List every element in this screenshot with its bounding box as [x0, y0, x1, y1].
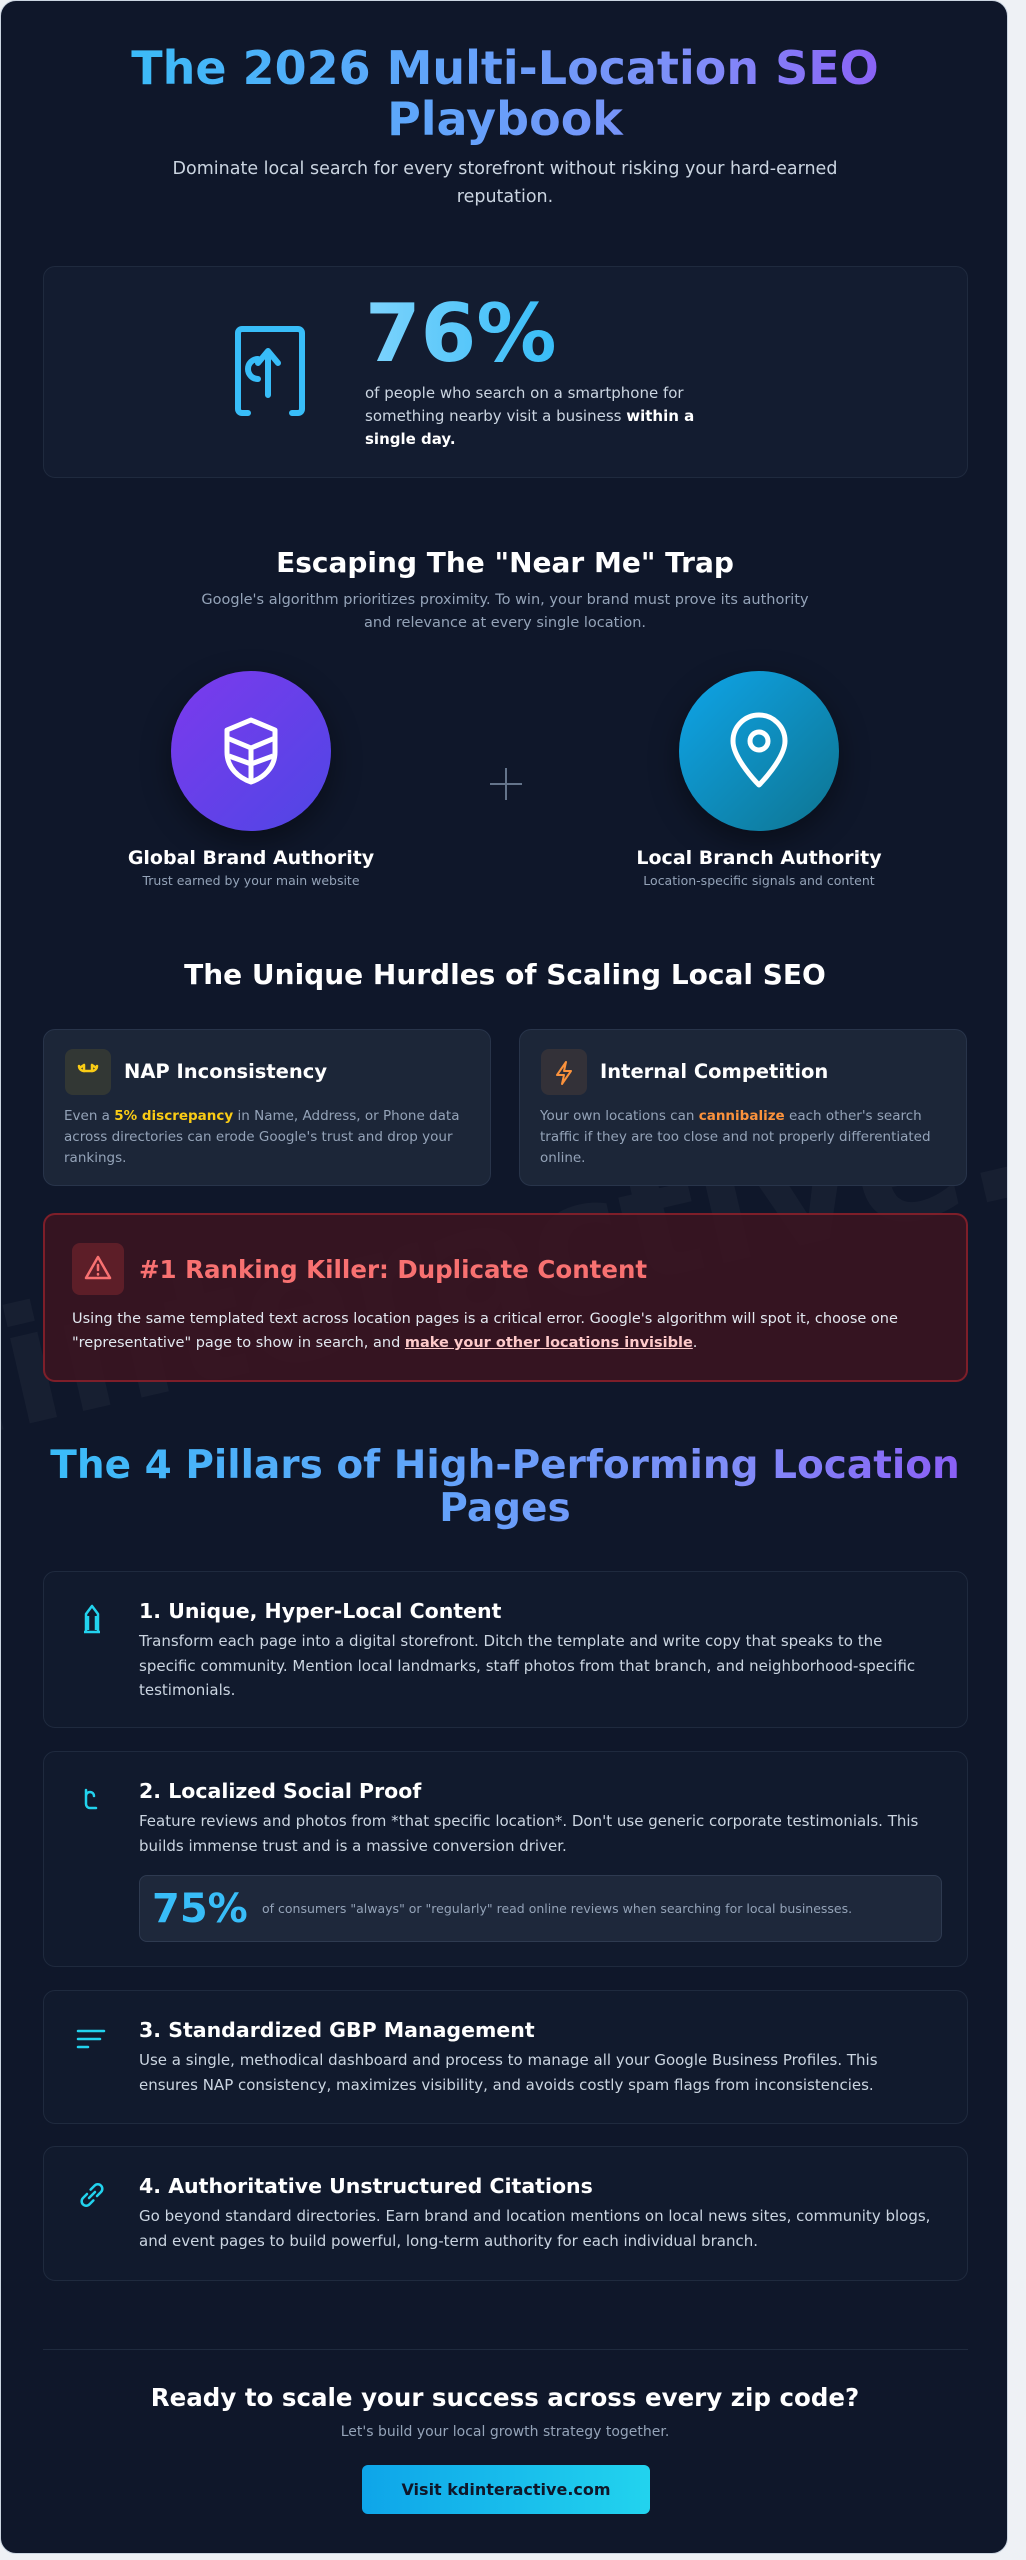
heading: 4 pillars: The 4 Pillars of High-Performing Location Pages [50, 1443, 960, 1531]
text: near me description: Google's algorithm prioritizes proximity. To win, your brand must prove its authority and relevance at every single location. [201, 592, 809, 631]
panel: internal competition: Internal Competition [600, 1060, 828, 1083]
stat: 75%: 75% [152, 1886, 248, 1932]
icon: link [80, 2183, 104, 2207]
panel: pillar 3 [43, 1990, 968, 2124]
label: local branch authority: Local Branch Authority [636, 847, 882, 869]
stat number: 76% [365, 287, 556, 380]
icon: social proof [84, 1788, 98, 1810]
label: local branch authority: Location-specific signals and content [643, 873, 875, 888]
button: visit [362, 2465, 650, 2514]
icon: smartphone tap [235, 326, 305, 416]
panel: pillar 1: 1. Unique, Hyper-Local Content [139, 1599, 501, 1623]
callout: duplicate content [43, 1213, 968, 1382]
panel: NAP inconsistency: Even a 5% discrepancy in Name, Address, or Phone data across directories can erode Google's trust and drop your rankings. [64, 1108, 459, 1166]
heading: hurdles: The Unique Hurdles of Scaling Local SEO [184, 958, 826, 991]
panel: pillar 1 [43, 1571, 968, 1728]
stat: 75%: of consumers "always" or "regularly" read online reviews when searching for local businesses. [262, 1901, 852, 1916]
panel: internal competition [519, 1029, 967, 1186]
stat: 75% [139, 1875, 942, 1942]
callout: duplicate content: #1 Ranking Killer: Duplicate Content [139, 1255, 647, 1284]
panel: pillar 2: Feature reviews and photos from *that specific location*. Don't use generic corporate testimonials. This builds immense trust and is a massive conversion driver. [139, 1812, 918, 1854]
panel: internal competition: Your own locations can cannibalize each other's search traffic if they are too close and not properly differentiated online. [540, 1108, 931, 1166]
panel: pillar 3: 3. Standardized GBP Management [139, 2018, 535, 2042]
button: visit: Visit kdinteractive.com [401, 2480, 611, 2499]
label: global brand authority [128, 847, 374, 888]
panel: pillar 3: Use a single, methodical dashboard and process to manage all your Google Business Profiles. This ensures NAP consistency, maximizes visibility, and avoids costly spam flags from inconsistencies. [139, 2051, 878, 2094]
icon: lightning [541, 1049, 587, 1095]
text: CTA sub: Let's build your local growth strategy together. [341, 2424, 669, 2440]
panel: pillar 4 [43, 2146, 968, 2281]
icon: global brand circle [171, 671, 331, 831]
panel: NAP inconsistency: NAP Inconsistency [124, 1060, 327, 1083]
icon: storefront [84, 1604, 100, 1634]
icon: plus [490, 768, 522, 800]
title: The 2026 Multi-Location SEO Playbook [131, 41, 879, 146]
heading: CTA: Ready to scale your success across every zip code? [151, 2383, 859, 2412]
subtitle: Dominate local search for every storefront without risking your hard-earned reputation. [173, 159, 837, 207]
panel: pillar 4: 4. Authoritative Unstructured Citations [139, 2174, 593, 2198]
panel: stat 76% [43, 266, 968, 478]
stat text: of people who search on a smartphone for something nearby visit a business within a single day. [365, 384, 694, 448]
panel: NAP inconsistency [43, 1029, 491, 1186]
label: global brand authority: Trust earned by your main website [142, 873, 360, 888]
panel: pillar 2 [43, 1751, 968, 1967]
label: local branch authority [636, 847, 882, 888]
panel: pillar 4: Go beyond standard directories. Earn brand and location mentions on local news sites, community blogs, and event pages to build powerful, long-term authority for each individual branch. [139, 2207, 930, 2250]
panel: pillar 1: Transform each page into a digital storefront. Ditch the template and write copy that speaks to the specific community. Mention local landmarks, staff photos from that branch, and neighborhood-specific testimonials. [139, 1632, 915, 1699]
label: global brand authority: Global Brand Authority [128, 847, 374, 869]
icon: NAP [65, 1049, 111, 1095]
callout: duplicate content: Using the same templated text across location pages is a critical error. Google's algorithm will spot it, choose one "representative" page to show in search, and make your other locations invisible. [72, 1311, 898, 1351]
panel: pillar 2: 2. Localized Social Proof [139, 1779, 421, 1803]
icon: list [76, 2030, 106, 2048]
heading: near me trap: Escaping The "Near Me" Trap [276, 546, 734, 579]
icon: warning [72, 1243, 124, 1295]
icon: local branch circle [679, 671, 839, 831]
